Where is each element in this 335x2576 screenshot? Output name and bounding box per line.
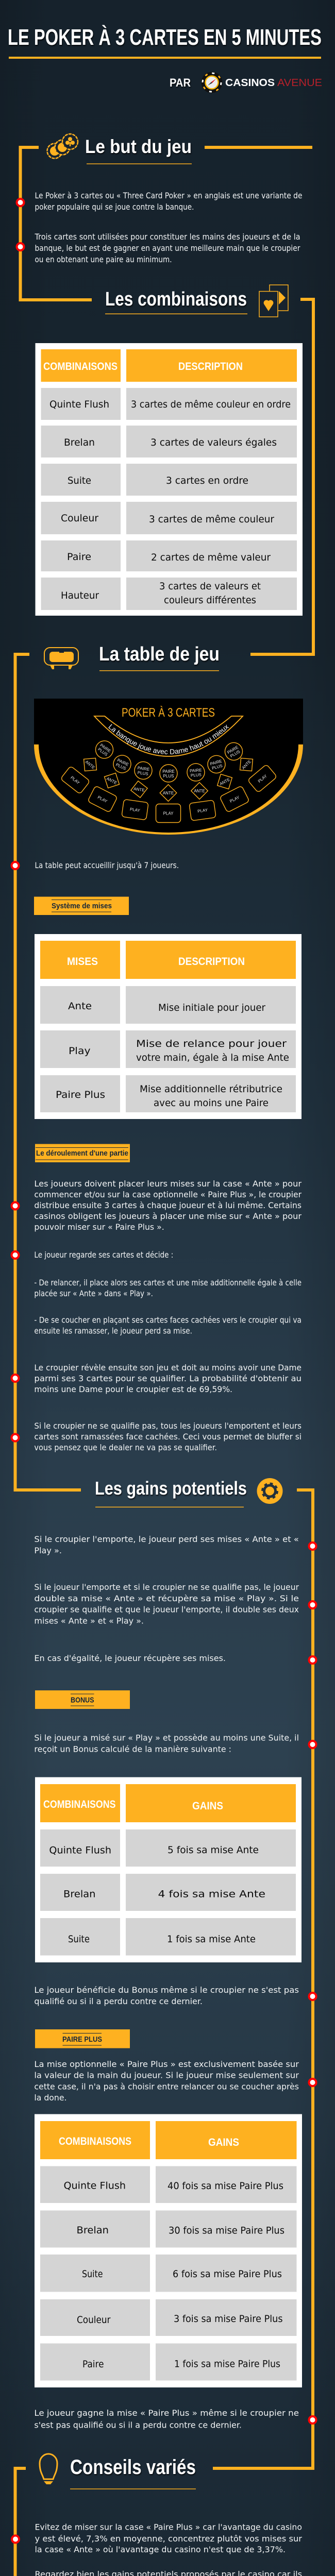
heading: la table de jeu: La table de jeu	[99, 643, 220, 665]
text: tie: En cas d'égalité, le joueur récupère ses mises.	[34, 1653, 226, 1663]
text: dealer reveals: parmi ses 3 cartes pour se qualifier. La probabilité d'obtenir au	[34, 1374, 301, 1383]
label: deroulement: Le déroulement d'une partie	[36, 1149, 128, 1158]
rail: section 5	[15, 2468, 303, 2576]
betting spots: play: PLAY	[129, 807, 141, 813]
icon: casino chip logo	[201, 72, 223, 93]
table: combinaisons: Suite	[68, 475, 91, 486]
text: placing bets: commencer et/ou sur la case optionnelle « Paire Plus », le croupier	[34, 1190, 301, 1199]
table: bonus gains: GAINS	[192, 1800, 223, 1812]
text: paire plus intro: cette case, il n'a pas à choisir entre relancer ou se coucher après	[34, 2081, 299, 2092]
table: combinaisons: 3 cartes de valeurs égales	[150, 437, 277, 448]
text: placing bets: distribue ensuite 3 cartes à chaque joueur et à lui même. Certains	[34, 1200, 301, 1210]
text: fold	[34, 1315, 301, 1335]
table: combinaisons: 3 cartes de valeurs et	[159, 581, 261, 592]
marker	[11, 1202, 19, 1210]
table: bonus gains	[35, 1777, 301, 1962]
label: bonus: BONUS	[71, 1696, 94, 1704]
text: bonus note: Le joueur bénéficie du Bonus même si le croupier ne s'est pas	[34, 1985, 299, 1995]
text: paire plus note: s'est pas qualifié ou si il a perdu contre ce dernier.	[34, 2420, 242, 2430]
marker	[16, 243, 24, 250]
betting spots: paire plus: PLUS	[191, 772, 202, 778]
table diagram: poker table	[34, 699, 303, 835]
betting spots: play: PLAY	[97, 795, 108, 804]
text: player wins: croupier se qualifie et que le joueur l'emporte, il double ses deux	[34, 1604, 299, 1615]
marker	[309, 1601, 316, 1608]
betting spots: paire plus	[92, 737, 246, 782]
table: mises: Mise de relance pour jouer	[136, 1038, 287, 1049]
betting spots: paire plus: PAIRE	[190, 768, 202, 773]
text: placing bets	[34, 1179, 301, 1232]
marker	[11, 1251, 19, 1259]
text: raise: placée sur « Ante » dans « Play ».	[34, 1289, 153, 1298]
text: player wins: double sa mise « Ante » et récupère sa mise « Play ». Si le	[34, 1594, 299, 1603]
table: mises: Play	[69, 1045, 91, 1057]
marker	[12, 2536, 19, 2543]
betting spots: ante: ANTE	[85, 759, 96, 770]
table: paire plus gains: 3 fois sa mise Paire Plus	[174, 2313, 282, 2325]
table diagram: poker table: POKER À 3 CARTES	[122, 706, 215, 720]
betting spots: paire plus: PAIRE	[99, 743, 112, 754]
table: combinaisons: Quinte Flush	[49, 399, 109, 410]
betting spots: play: PLAY	[229, 795, 241, 804]
table: paire plus gains: Paire	[82, 2359, 104, 2370]
heading: le but du jeu: Le but du jeu	[85, 136, 192, 157]
text: player wins	[34, 1582, 299, 1626]
text: tip 1: y est élevé, 7,3% en moyenne, concentrez plutôt vos mises sur	[35, 2534, 302, 2544]
table: combinaisons: 2 cartes de même valeur	[151, 552, 271, 563]
marker	[11, 862, 19, 869]
text: dealer not qualified: Si le croupier ne se qualifie pas, tous les joueurs l'emportent et leurs	[34, 1421, 301, 1431]
betting spots: paire plus: PLUS	[137, 770, 148, 776]
byline: par Casinos Avenue: CASINOS	[225, 77, 275, 89]
marker	[309, 1543, 316, 1550]
marker	[11, 1375, 19, 1382]
text: dealer reveals: moins une Dame pour le croupier est de 69,59%.	[34, 1384, 232, 1394]
marker	[309, 1741, 316, 1748]
table: mises: Paire Plus	[56, 1089, 105, 1100]
label: systeme de mises: Système de mises	[52, 902, 112, 910]
marker	[11, 1434, 19, 1442]
text: raise	[34, 1278, 301, 1298]
text: bonus note: qualifié ou si il a perdu contre ce dernier.	[34, 1996, 203, 2006]
text: paire plus note: Le joueur gagne la mise « Paire Plus » même si le croupier ne	[34, 2408, 299, 2418]
text: seven players: La table peut accueillir jusqu'à 7 joueurs.	[35, 860, 179, 870]
heading: les combinaisons: Les combinaisons	[105, 289, 247, 310]
betting spots: paire plus: PAIRE	[226, 745, 239, 755]
text: bonus intro: reçoit un Bonus calculé de la manière suivante :	[34, 1744, 231, 1754]
betting spots: ante: ANTE	[106, 776, 118, 785]
text: intro 1: poker populaire qui se joue contre la banque.	[35, 202, 194, 212]
table: bonus gains: 5 fois sa mise Ante	[167, 1844, 259, 1856]
text: paire plus intro: la done.	[34, 2093, 67, 2103]
table: bonus gains: COMBINAISONS	[43, 1799, 115, 1810]
betting spots: ante: ANTE	[163, 791, 174, 795]
table: mises: votre main, égale à la mise Ante	[136, 1052, 289, 1063]
betting spots: paire plus: PLUS	[97, 747, 108, 757]
table: bonus gains: Brelan	[63, 1889, 96, 1900]
text: dealer wins: Si le croupier l'emporte, le joueur perd ses mises « Ante » et «	[34, 1534, 299, 1544]
table: combinaisons: Couleur	[61, 513, 98, 524]
byline: par Casinos Avenue	[170, 72, 322, 93]
betting spots: play	[60, 764, 277, 822]
text: paire plus note	[34, 2408, 299, 2430]
label: paire plus	[35, 2029, 130, 2048]
betting spots: paire plus: PLUS	[115, 762, 127, 771]
label: systeme de mises	[34, 896, 129, 915]
text: tip 1: la case « Ante » où l'avantage du casino n'est que de 3,37%.	[35, 2545, 286, 2554]
text: player wins: mises « Ante » et « Play ».	[34, 1616, 144, 1626]
text: bonus intro	[34, 1733, 299, 1754]
table: paire plus gains: Suite	[82, 2268, 103, 2280]
table: mises: Mise initiale pour jouer	[158, 1002, 265, 1013]
text: intro 1	[35, 191, 302, 212]
table: bonus gains: 4 fois sa mise Ante	[158, 1889, 265, 1900]
betting spots: paire plus: PLUS	[229, 749, 241, 758]
rail: section 1	[21, 147, 92, 300]
text: fold: ensuite les ramasser, le joueur perd sa mise.	[34, 1326, 192, 1335]
betting spots: ante: ANTE	[241, 759, 252, 770]
icon: gear	[257, 1478, 282, 1504]
table: paire plus gains: 1 fois sa mise Paire Plus	[174, 2359, 280, 2370]
text: dealer not qualified: vous pensez que le dealer ne va pas se qualifier.	[34, 1443, 217, 1452]
band: dealer rule: La banque joue avec Dame haut ou mieux	[108, 724, 229, 754]
betting spots: play: PLAY	[197, 808, 208, 814]
rail: section 3	[15, 654, 81, 1490]
heading: conseils varies: Conseils variés	[70, 2456, 196, 2479]
table: mises: Ante	[68, 1001, 92, 1012]
table: paire plus gains	[35, 2114, 302, 2387]
marker	[16, 199, 24, 206]
table: paire plus gains: 6 fois sa mise Paire Plus	[173, 2268, 282, 2280]
text: tip 1: Evitez de miser sur la case « Paire Plus » car l'avantage du casino	[35, 2522, 302, 2532]
table: combinaisons: couleurs différentes	[164, 595, 256, 606]
text: bonus note	[34, 1985, 299, 2006]
betting spots: paire plus: PAIRE	[137, 766, 150, 772]
table: bonus gains: 1 fois sa mise Ante	[167, 1934, 256, 1945]
icon: table	[44, 648, 78, 669]
table: paire plus gains: 30 fois sa mise Paire Plus	[169, 2225, 284, 2236]
table: paire plus gains: Couleur	[77, 2314, 111, 2326]
betting spots: ante	[84, 758, 253, 801]
betting spots: ante: ANTE	[133, 787, 145, 792]
betting spots: paire plus: PAIRE	[210, 759, 223, 766]
text: intro 2: banque, le but est de gagner en ayant une meilleure main que le croupier	[35, 243, 300, 253]
table: mises: MISES	[67, 956, 98, 968]
text: player wins: Si le joueur l'emporte et si le croupier ne se qualifie pas, le joueur	[34, 1582, 299, 1592]
table: combinaisons: COMBINAISONS	[43, 361, 118, 372]
rail: section 2	[250, 299, 313, 654]
icon: chips	[47, 134, 78, 159]
table: bonus gains: Suite	[68, 1934, 90, 1945]
table: combinaisons	[35, 343, 303, 616]
betting spots: paire plus: PAIRE	[162, 769, 175, 774]
table: bonus gains: Quinte Flush	[49, 1844, 111, 1856]
byline: par Casinos Avenue: PAR	[170, 76, 191, 89]
marker	[309, 2416, 316, 2424]
text: placing bets: casinos obligent les joueurs à placer une mise sur « Ante » pour	[34, 1211, 301, 1221]
band: dealer rule	[93, 716, 244, 757]
text: intro 2: ou en obtenant une paire au minimum.	[35, 255, 172, 264]
text: dealer reveals	[34, 1363, 301, 1394]
table: mises: Mise additionnelle rétributrice	[140, 1083, 282, 1095]
icon: light bulb	[40, 2454, 57, 2484]
table: mises	[35, 934, 301, 1119]
label: deroulement	[35, 1144, 130, 1162]
table: paire plus gains: GAINS	[208, 2137, 239, 2148]
table: combinaisons: Paire	[67, 551, 91, 563]
betting spots: play: PLAY	[257, 773, 268, 784]
text: paire plus intro: la valeur de la main du joueur. Si le joueur mise seulement sur	[34, 2070, 299, 2080]
marker	[309, 1656, 316, 1664]
text: bonus intro: Si le joueur a misé sur « Play » et possède au moins une Suite, il	[34, 1733, 299, 1742]
betting spots: paire plus: PLUS	[211, 764, 223, 771]
table: combinaisons: Hauteur	[61, 590, 99, 601]
text: paire plus intro: La mise optionnelle « Paire Plus » est exclusivement basée sur	[34, 2059, 299, 2069]
betting spots: play: PLAY	[70, 775, 81, 785]
table: combinaisons: Brelan	[64, 437, 95, 448]
table: paire plus gains: 40 fois sa mise Paire Plus	[167, 2180, 283, 2192]
marker	[309, 1993, 316, 2000]
table: combinaisons: 3 cartes de même couleur en ordre	[131, 399, 291, 410]
betting spots: ante: ANTE	[194, 789, 205, 793]
heading: gains potentiels: Les gains potentiels	[95, 1478, 247, 1499]
byline: par Casinos Avenue: AVENUE	[277, 77, 322, 89]
betting spots: paire plus: PAIRE	[116, 758, 129, 767]
text: placing bets: Les joueurs doivent placer leurs mises sur la case « Ante » pour	[34, 1179, 301, 1189]
text: dealer not qualified	[34, 1421, 301, 1452]
text: dealer not qualified: cartes sont ramassées face cachées. Ceci vous permet de bluffer si	[34, 1432, 301, 1442]
betting spots: ante: ANTE	[219, 777, 231, 786]
text: dealer wins: Play ».	[34, 1546, 62, 1555]
text: dealer reveals: Le croupier révèle ensuite son jeu et doit au moins avoir une Dame	[34, 1363, 301, 1372]
text: dealer wins	[34, 1534, 299, 1555]
table: mises: avec au moins une Paire	[154, 1097, 269, 1109]
text: paire plus intro	[34, 2059, 299, 2103]
text: intro 2: Trois cartes sont utilisées pour constituer les mains des joueurs et de la	[35, 232, 300, 242]
label: paire plus: PAIRE PLUS	[62, 2035, 102, 2044]
text: placing bets: pouvoir miser sur « Paire Plus ».	[34, 1222, 164, 1232]
table: paire plus gains: COMBINAISONS	[59, 2136, 131, 2147]
marker	[309, 2079, 316, 2086]
text: tip 1	[35, 2522, 302, 2554]
table: combinaisons: 3 cartes de même couleur	[149, 514, 274, 525]
label: bonus	[35, 1690, 130, 1709]
text: decision: Le joueur regarde ses cartes et décide :	[34, 1250, 173, 1260]
rail: section 4	[213, 1490, 313, 2468]
table: mises: DESCRIPTION	[178, 956, 245, 968]
table: combinaisons: 3 cartes en ordre	[166, 475, 248, 486]
table: paire plus gains: Brelan	[76, 2225, 109, 2236]
table: combinaisons: DESCRIPTION	[178, 361, 243, 372]
icon: cards	[259, 285, 288, 317]
text: intro 2	[35, 232, 300, 264]
table: paire plus gains: Quinte Flush	[64, 2180, 126, 2192]
betting spots: paire plus: PLUS	[163, 774, 174, 778]
text: intro 1: Le Poker à 3 cartes ou « Three Card Poker » en anglais est une variante de	[35, 191, 302, 200]
betting spots: play: PLAY	[163, 811, 174, 816]
